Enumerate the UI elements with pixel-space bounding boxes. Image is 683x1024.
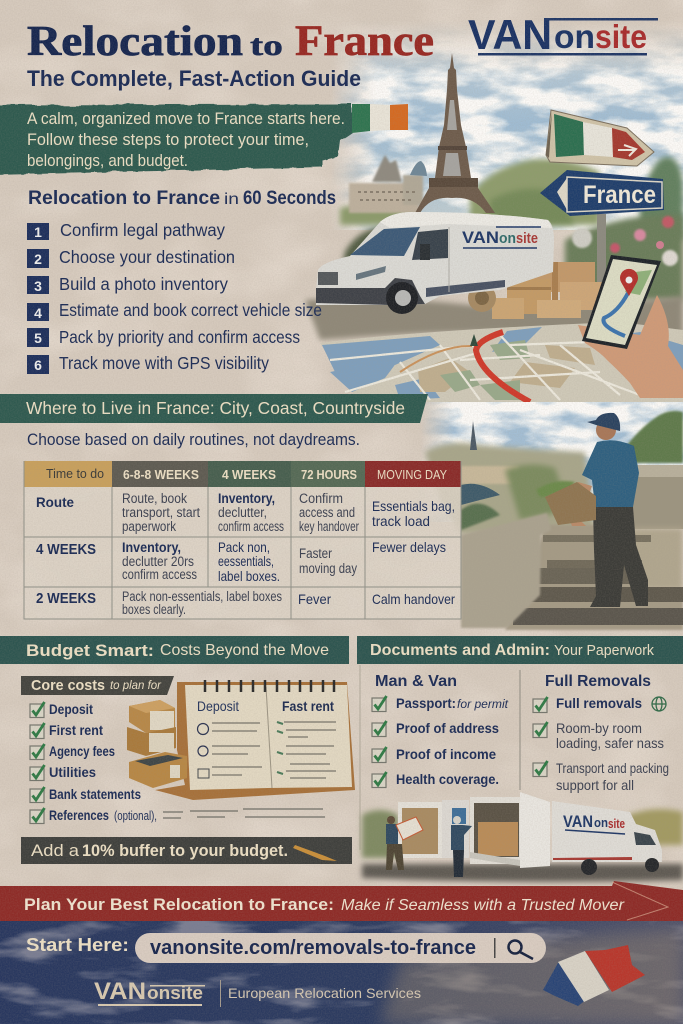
item: transport and packing <box>533 760 669 793</box>
row: 4 weeks: Fewer delays <box>372 539 446 555</box>
title: France <box>295 18 434 65</box>
notepad: fast rent column <box>277 698 336 778</box>
heading: in 60 seconds <box>28 187 336 209</box>
logo: site <box>595 18 647 55</box>
hillside trees <box>340 157 683 280</box>
row: 2 weeks <box>36 589 455 617</box>
item: room by room: Room-by room <box>556 720 642 736</box>
item: room by room <box>533 720 664 751</box>
sign: France: France <box>583 181 656 209</box>
item: full removals: Full removals <box>556 695 642 711</box>
item: passport <box>372 695 509 712</box>
logo <box>468 11 658 58</box>
man carrying a box <box>545 413 648 607</box>
heading: in 60 seconds: Relocation to France <box>28 187 220 209</box>
item: proof of income: Proof of income <box>396 746 496 762</box>
buffer callout <box>21 837 352 864</box>
item: passport: Passport: <box>396 695 456 711</box>
item: deposit: Deposit <box>49 701 93 717</box>
row: 4 weeks: 4 WEEKS <box>36 542 96 558</box>
trees <box>623 411 683 463</box>
town <box>425 421 595 535</box>
step 6: 6 <box>34 357 42 373</box>
icon: pencil <box>293 845 337 861</box>
table header: 72 HOURS <box>301 468 357 482</box>
removal truck scene <box>362 792 683 882</box>
stairs <box>505 525 683 630</box>
logo: VAN <box>468 11 552 58</box>
notepad: fast rent column: Fast rent <box>282 698 334 714</box>
item: references: References <box>49 807 109 823</box>
step 4: Estimate and book correct vehicle size <box>59 300 322 320</box>
row: 4 weeks: moving day <box>299 561 357 576</box>
row: route: key handover <box>299 519 359 534</box>
title: to <box>250 29 283 62</box>
row: route <box>36 490 455 534</box>
intro band: Follow these steps to protect your time, <box>27 131 309 149</box>
start here label: Start Here: <box>26 935 129 955</box>
row: route: Confirm <box>299 491 343 506</box>
table header <box>24 461 461 487</box>
section band: documents: Documents and Admin: <box>370 642 550 659</box>
item: health coverage: Health coverage. <box>396 771 499 787</box>
row: 2 weeks: Pack non-essentials, label boxes <box>122 589 282 604</box>
item: transport and packing: support for all <box>556 777 634 793</box>
step 5: Pack by priority and confirm access <box>59 327 300 347</box>
table header: MOVING DAY <box>377 468 448 482</box>
hero illustration <box>305 20 683 402</box>
truck logo: VAN <box>563 812 593 831</box>
core costs tag: to plan for <box>110 678 162 692</box>
sign: flag arrow <box>546 110 654 166</box>
red banner arrow: Plan Your Best Relocation to France: <box>24 895 334 914</box>
truck logo: on <box>594 815 608 830</box>
worker with box <box>386 816 423 870</box>
table header: Time to do <box>46 467 104 481</box>
Eiffel tower <box>415 53 495 213</box>
buffer callout: Add a <box>31 841 80 860</box>
title: Relocation <box>27 19 243 65</box>
heading: in 60 seconds: in <box>224 191 239 208</box>
van <box>316 212 554 314</box>
section band: where to live <box>0 394 428 423</box>
heading: in 60 seconds: 60 Seconds <box>243 187 336 209</box>
van wheel <box>386 282 418 314</box>
row: route: Route, book <box>122 491 187 506</box>
notepad: deposit column: Deposit <box>197 698 239 714</box>
step 1: Confirm legal pathway <box>60 220 225 240</box>
step 2: Choose your destination <box>59 247 235 267</box>
row: 2 weeks: boxes clearly. <box>122 602 186 617</box>
column: man and van: Man & Van <box>375 673 457 690</box>
footer divider <box>220 980 221 1007</box>
item: references: (optional), <box>114 808 157 823</box>
row: route: track load <box>372 513 430 529</box>
column: man and van <box>372 673 509 788</box>
section band: budget smart: Costs Beyond the Move <box>160 642 329 659</box>
grid lines <box>24 461 461 619</box>
row: 2 weeks: Fever <box>298 591 331 607</box>
navy footer background <box>0 921 683 1024</box>
footer tagline: European Relocation Services <box>228 985 421 1001</box>
truck cab body <box>552 801 662 875</box>
step 5: 5 <box>34 330 42 346</box>
timeline table <box>24 461 461 619</box>
phone with GPS map <box>582 255 661 349</box>
boxes <box>468 262 602 319</box>
van logo: VAN <box>462 228 499 247</box>
intro band: A calm, organized move to France starts here. <box>27 110 345 128</box>
row: route: confirm access <box>218 519 284 534</box>
table header: 6-8-8 WEEKS <box>123 468 199 482</box>
sign pole <box>597 214 606 282</box>
step 2: 2 <box>34 251 42 267</box>
row: 4 weeks: Inventory, <box>122 539 181 555</box>
row: 4 weeks: label boxes. <box>218 568 280 584</box>
column: full removals: Full Removals <box>545 673 651 690</box>
row: 4 weeks: Faster <box>299 546 332 561</box>
item: passport: for permit <box>457 697 509 711</box>
hand <box>578 295 683 398</box>
sign: France <box>540 170 664 216</box>
icon: magnifier <box>508 940 533 959</box>
numbered steps <box>27 220 322 374</box>
row: 2 weeks: Calm handover <box>372 591 455 607</box>
buffer callout: 10% buffer to your budget. <box>82 841 288 860</box>
icon: globe <box>652 697 666 711</box>
item: bank statements: Bank statements <box>49 786 141 802</box>
stone wall <box>461 513 551 628</box>
spiral binding <box>205 680 334 692</box>
intro band <box>0 104 408 175</box>
truck rear box <box>398 800 469 858</box>
column: full removals <box>533 673 669 793</box>
step 3: 3 <box>34 278 42 294</box>
section band: documents: Your Paperwork <box>554 643 655 659</box>
core costs tag: Core costs <box>31 677 105 694</box>
flowers bush <box>565 215 683 300</box>
title <box>27 18 434 65</box>
section band: budget smart <box>0 636 349 664</box>
row: 4 weeks: Pack non, <box>218 539 270 555</box>
sky <box>420 402 683 522</box>
row: route: access and <box>299 505 355 520</box>
step 4: 4 <box>34 305 42 321</box>
intro band: belongings, and budget. <box>27 152 188 170</box>
red banner arrow: Make if Seamless with a Trusted Mover <box>341 897 625 914</box>
flag <box>352 104 408 133</box>
URL search pill: vanonsite.com/removals-to-france <box>150 937 476 959</box>
section band: documents <box>357 636 683 664</box>
walking scene illustration <box>420 402 683 630</box>
row: 4 weeks: confirm access <box>122 567 197 582</box>
item: agency fees: Agency fees <box>49 743 115 759</box>
red banner arrow <box>0 881 683 921</box>
step 6: Track move with GPS visibility <box>59 353 269 373</box>
subtitle: The Complete, Fast-Action Guide <box>27 66 361 91</box>
step 3: Build a photo inventory <box>59 274 228 294</box>
notepad: deposit column <box>197 698 262 778</box>
row: route: Inventory, <box>218 490 275 506</box>
item: references <box>30 807 157 824</box>
ground <box>362 864 683 882</box>
fine print <box>163 809 325 818</box>
treeline <box>362 810 398 858</box>
footer logo <box>94 978 205 1006</box>
documents panel lines <box>359 665 361 850</box>
URL search pill <box>135 933 546 963</box>
table header: 4 WEEKS <box>222 468 276 482</box>
truck middle box <box>470 792 550 868</box>
row: 4 weeks: eessentials, <box>218 553 274 569</box>
footer logo: onsite <box>147 983 203 1003</box>
row: route: Essentials bag, <box>372 498 455 514</box>
row: 4 weeks: declutter 20rs <box>122 554 194 569</box>
row: route: transport, start <box>122 505 200 520</box>
French flag map <box>543 945 645 1006</box>
section band: where to live: Where to Live in France: City, Coast, Countryside <box>26 398 405 418</box>
truck logo: site <box>608 816 625 831</box>
item: utilities: Utilities <box>49 764 96 780</box>
spiral notepad <box>155 680 355 800</box>
core costs tag <box>21 676 174 695</box>
row: 4 weeks <box>36 539 446 584</box>
item: room by room: loading, safer nass <box>556 735 664 751</box>
logo: on <box>554 18 595 55</box>
van logo <box>462 227 541 248</box>
stacked cartons <box>127 700 187 788</box>
section band: budget smart: Budget Smart: <box>26 641 154 660</box>
row: route: Route <box>36 494 74 510</box>
lead text: Choose based on daily routines, not daydreams. <box>27 430 360 449</box>
road <box>305 296 683 345</box>
item: first rent: First rent <box>49 722 103 738</box>
chateau <box>349 155 427 213</box>
footer logo: VAN <box>94 978 146 1005</box>
van logo: on <box>499 230 516 247</box>
row: route: declutter, <box>218 505 267 520</box>
van logo: site <box>516 230 538 247</box>
map on ground <box>320 322 683 402</box>
truck logo <box>563 812 625 834</box>
item: proof of address: Proof of address <box>396 720 499 736</box>
step 1: 1 <box>34 224 42 240</box>
row: route: paperwork <box>122 519 176 534</box>
checklist: core costs <box>30 701 157 824</box>
worker loading <box>451 816 472 877</box>
far wall <box>620 465 683 590</box>
row: 2 weeks: 2 WEEKS <box>36 591 96 607</box>
sky with clouds <box>330 20 683 230</box>
